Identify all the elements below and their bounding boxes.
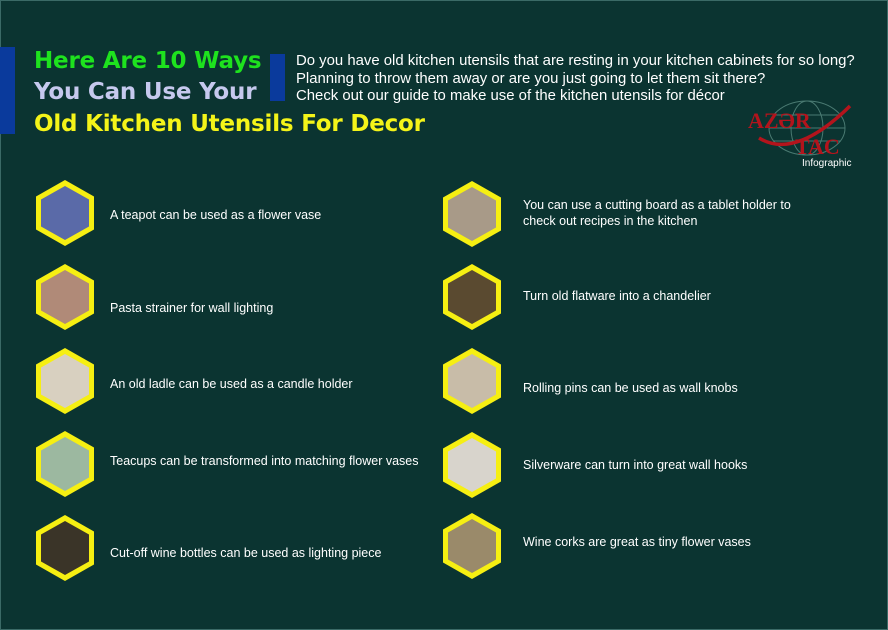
- title block: [0, 47, 285, 134]
- item 4: [36, 431, 418, 497]
- item 6: You can use a cutting board as a tablet holder to: [523, 198, 791, 212]
- intro text: Planning to throw them away or are you just going to let them sit there?: [296, 70, 765, 86]
- logo: Infographic: [802, 158, 851, 169]
- item 8: [443, 348, 738, 414]
- item 5: [36, 515, 381, 581]
- item 1: [36, 180, 321, 246]
- intro text: Check out our guide to make use of the kitchen utensils for décor: [296, 88, 725, 104]
- item 8: Rolling pins can be used as wall knobs: [523, 381, 738, 395]
- item 10: [443, 513, 751, 579]
- item 3: [36, 348, 353, 414]
- item 2: Pasta strainer for wall lighting: [110, 301, 273, 315]
- item 2: [36, 264, 273, 330]
- logo: AZƏR: [748, 108, 812, 133]
- item 9: [443, 432, 747, 498]
- item 1: A teapot can be used as a flower vase: [110, 208, 321, 222]
- logo: [748, 100, 852, 169]
- title line 2: You Can Use Your: [34, 79, 256, 105]
- intro text: Do you have old kitchen utensils that are resting in your kitchen cabinets for so long?: [296, 53, 855, 69]
- item 6: [443, 181, 791, 247]
- intro text: [296, 53, 855, 104]
- item 9: Silverware can turn into great wall hooks: [523, 458, 747, 472]
- blue bar left: [0, 47, 15, 134]
- item 10: Wine corks are great as tiny flower vases: [523, 535, 751, 549]
- logo: TAC: [795, 134, 840, 159]
- title line 3: Old Kitchen Utensils For Decor: [34, 111, 425, 137]
- item 7: [443, 264, 711, 330]
- item 3: An old ladle can be used as a candle holder: [110, 377, 353, 391]
- item 6: check out recipes in the kitchen: [523, 214, 697, 228]
- item 7: Turn old flatware into a chandelier: [523, 289, 711, 303]
- title line 1: Here Are 10 Ways: [34, 48, 261, 74]
- item 4: Teacups can be transformed into matching flower vases: [110, 454, 418, 468]
- item 5: Cut-off wine bottles can be used as lighting piece: [110, 546, 381, 560]
- blue bar right: [270, 54, 285, 101]
